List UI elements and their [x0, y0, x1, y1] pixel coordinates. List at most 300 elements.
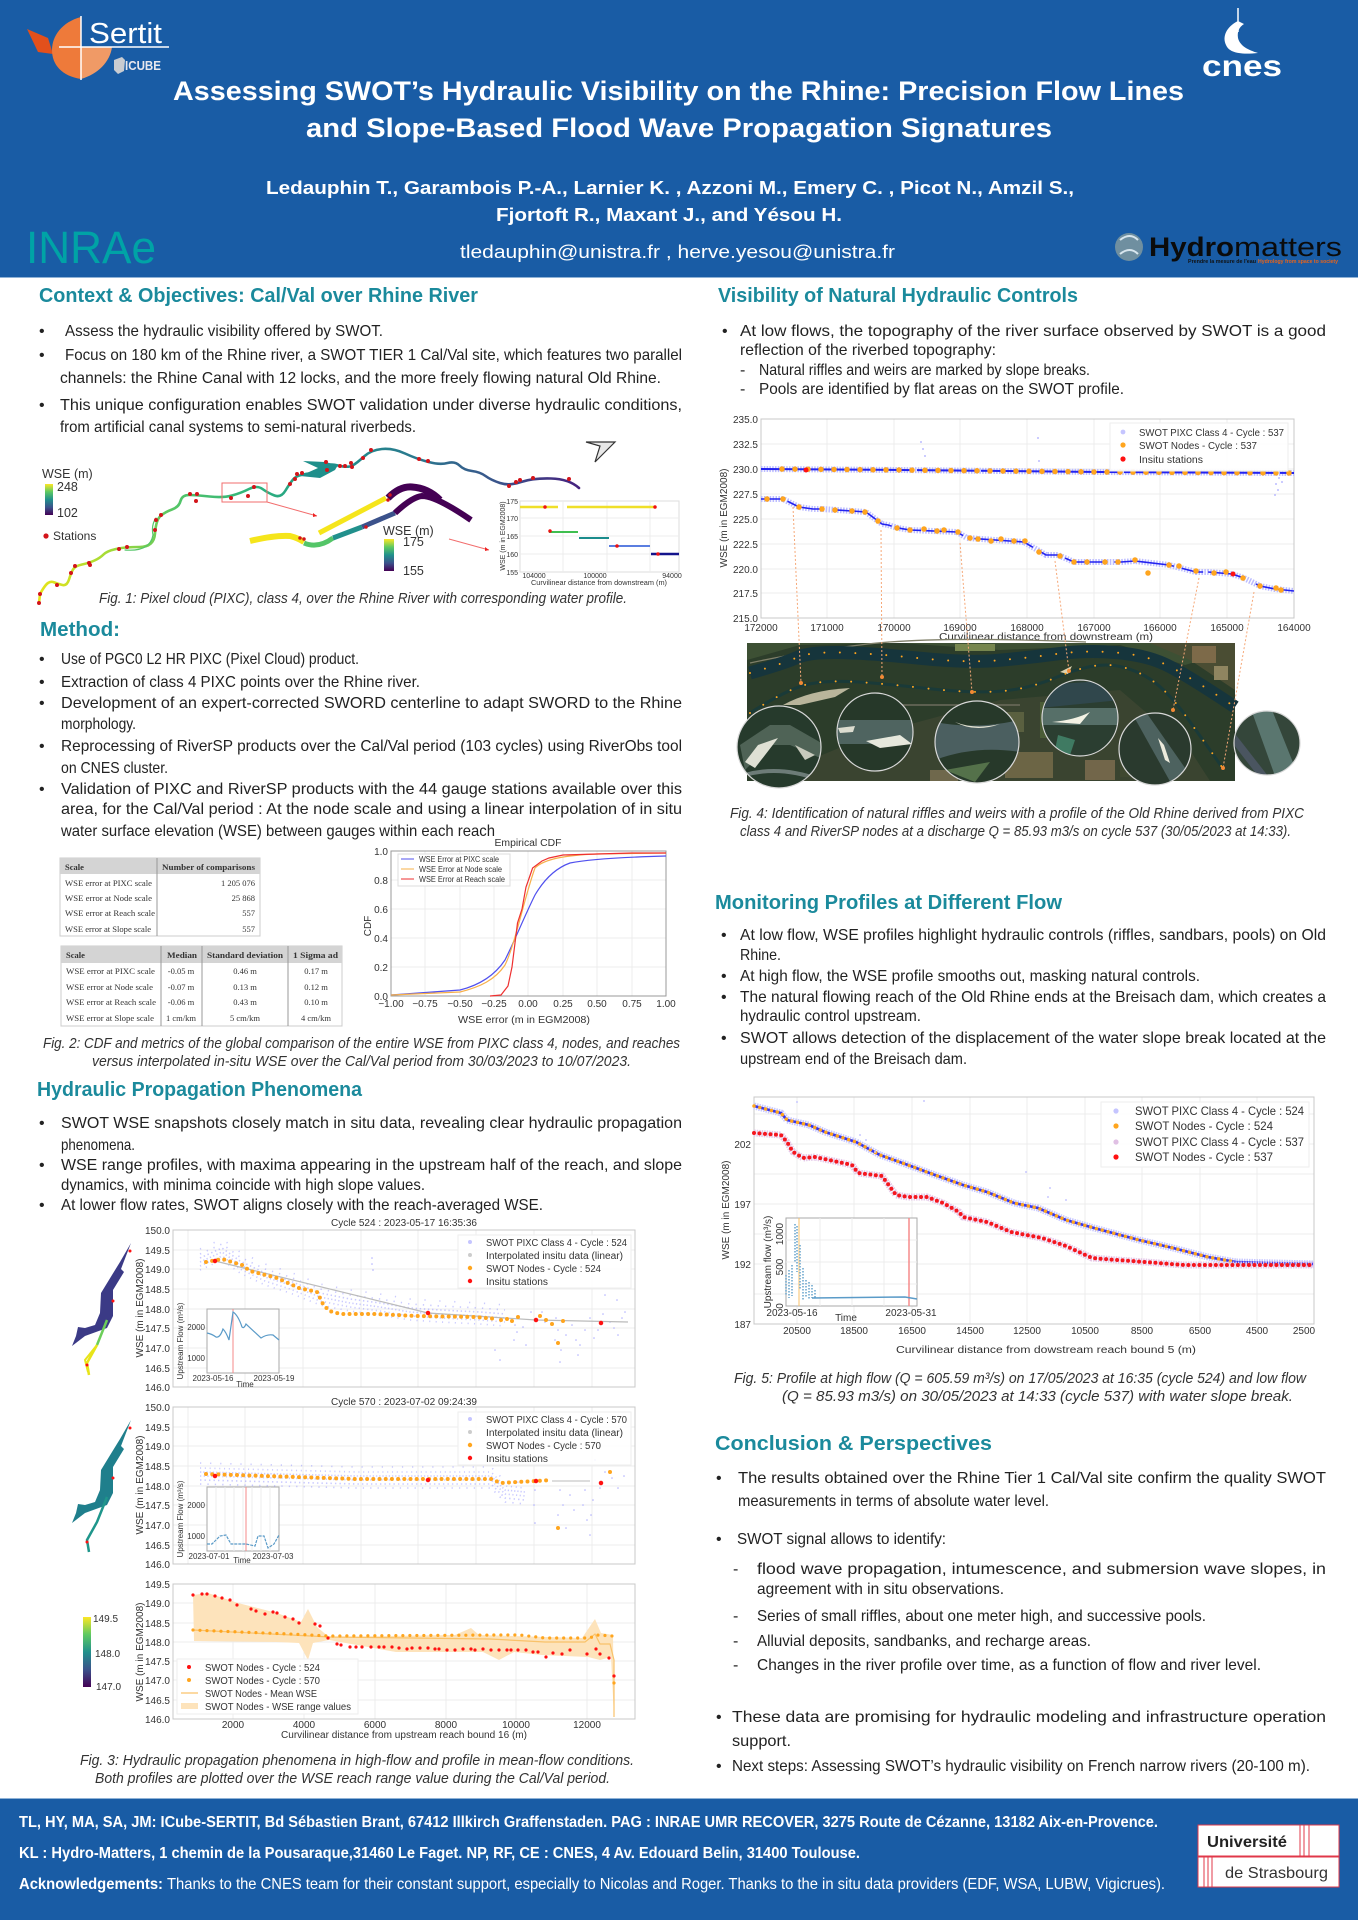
legend: WSE full range: 102	[57, 506, 78, 520]
chart: empirical CDF	[363, 838, 676, 1026]
inset: upstream flow: Upstream flow (m³/s)	[763, 1216, 774, 1308]
axis labels: 171000	[810, 623, 844, 634]
caption: figure 2: versus interpolated in-situ WSE over the Cal/Val period from 30/03/2023 to 10/07/2023.	[92, 1053, 631, 1070]
text block: conclusion: •	[716, 1758, 722, 1775]
logo: Hydromatters	[1115, 232, 1342, 265]
axis labels: 168000	[1010, 623, 1044, 634]
legend: cycle 570: Insitu stations	[486, 1454, 548, 1465]
legend: cycle 524: Insitu stations	[486, 1277, 548, 1288]
axis labels: 148.5	[145, 1619, 170, 1630]
axis labels: 4500	[1246, 1326, 1269, 1337]
table: error metrics: 4 cm/km	[301, 1013, 331, 1023]
text block: conclusion: Next steps: Assessing SWOT’s hydraulic visibility on French narrow rivers (20-100 m).	[732, 1758, 1310, 1775]
axis labels: 149.0	[145, 1442, 170, 1453]
caption: figure 2	[43, 1035, 680, 1070]
colorbar: reach WSE: 148.0	[95, 1649, 120, 1660]
bullet list: context: from artificial canal systems to semi-natural riverbeds.	[60, 419, 416, 436]
inset: upstream flow: 2023-05-31	[885, 1308, 937, 1319]
logo: Hydromatters: matters	[1234, 232, 1342, 262]
logo: Hydromatters: Hydro	[1149, 232, 1234, 262]
axis labels: 6500	[1189, 1326, 1212, 1337]
legend: cycle 524: SWOT PIXC Class 4 - Cycle : 524	[486, 1238, 627, 1249]
cycle 524 nodes	[193, 1594, 614, 1676]
chart: empirical CDF: Empirical CDF	[494, 838, 562, 849]
legend: cycle 537: SWOT PIXC Class 4 - Cycle : 537	[1139, 428, 1284, 439]
legend: cycle 570	[458, 1412, 631, 1465]
locator box and arrows	[222, 483, 489, 550]
river course colored by WSE	[39, 449, 579, 603]
table: number of comparisons: 1 205 076	[221, 878, 255, 888]
legend: cycle 524: SWOT Nodes - Cycle : 524	[486, 1264, 601, 1275]
inset: upstream flow 570: Time	[233, 1556, 251, 1565]
bullet list: method: on CNES cluster.	[61, 760, 168, 777]
contact emails: tledauphin@unistra.fr , herve.yesou@unistra.fr	[460, 242, 895, 262]
table: error metrics: 0.12 m	[304, 982, 328, 992]
axis labels: 150.0	[145, 1403, 170, 1414]
axis labels: 235.0	[733, 415, 758, 426]
axis labels	[719, 415, 1311, 643]
bullet list: visibility: At low flows, the topography of the river surface observed by SWOT is a good	[740, 323, 1326, 340]
axis labels	[135, 1226, 170, 1394]
authors: Fjortoft R., Maxant J., and Yésou H.	[496, 205, 842, 225]
logo: Sertit ICube: Sertit	[89, 18, 162, 50]
axis labels: 14500	[956, 1326, 984, 1337]
table: error metrics: 0.13 m	[233, 982, 257, 992]
bullet list: method: water surface elevation (WSE) between gauges within each reach	[60, 823, 495, 840]
bullet list: hydraulic propagation: •	[39, 1115, 45, 1132]
text block: conclusion: These data are promising for hydraulic modeling and infrastructure operation	[732, 1709, 1326, 1726]
legend: WSE full range: Stations	[53, 529, 96, 543]
chart: cycle 524 profile: Cycle 524 : 2023-05-17 16:35:36	[331, 1218, 477, 1229]
table: error metrics: Median	[167, 950, 197, 960]
axis labels: 147.5	[145, 1324, 170, 1335]
heading: monitoring: Monitoring Profiles at Different Flow	[715, 892, 1062, 914]
table: number of comparisons	[60, 858, 260, 936]
axis labels: 148.0	[145, 1638, 170, 1649]
axis labels: 220.0	[733, 565, 758, 576]
axis labels: 230.0	[733, 465, 758, 476]
legend: flows	[1101, 1102, 1309, 1167]
text block: conclusion: Changes in the river profile over time, as a function of flow and river level.	[757, 1657, 1261, 1674]
heading: conclusion: Conclusion & Perspectives	[715, 1433, 992, 1455]
axis labels: 149.0	[145, 1599, 170, 1610]
cycle 570 nodes	[193, 1630, 613, 1638]
logo: INRAE: INRAe	[26, 222, 156, 273]
text block: conclusion: agreement with in situ observations.	[757, 1581, 1004, 1598]
text block: conclusion: Alluvial deposits, sandbanks, and recharge areas.	[757, 1633, 1091, 1650]
axis labels: 146.5	[145, 1696, 170, 1707]
axis labels: 147.0	[145, 1521, 170, 1532]
zoom circle: weir	[1233, 710, 1301, 776]
chart: empirical CDF: 0.4	[374, 934, 388, 945]
axis labels: WSE (m in EGM2008)	[135, 1436, 146, 1534]
inset: upstream flow: 1000	[775, 1222, 786, 1245]
caption: figure 5: Fig. 5: Profile at high flow (Q = 605.59 m³/s) on 17/05/2023 at 16:35 (cycle 524) and low flow	[734, 1370, 1307, 1387]
caption: figure 5: (Q = 85.93 m3/s) on 30/05/2023 at 14:33 (cycle 537) with water slope break.	[782, 1388, 1293, 1405]
inset: upstream flow 524	[176, 1302, 295, 1389]
table: error metrics: 0.46 m	[233, 966, 257, 976]
canal profile	[761, 469, 1294, 473]
legend: WSE zoom range: 155	[403, 564, 424, 578]
PIXC scatter	[200, 1239, 505, 1326]
inset: water profile: 170	[506, 516, 518, 523]
inset: upstream flow 524: 2000	[187, 1323, 206, 1332]
legend: cycle 537: Insitu stations	[1139, 455, 1203, 466]
bullet list: monitoring: Rhine.	[740, 947, 781, 964]
table: error metrics: 0.43 m	[233, 997, 257, 1007]
table: error metrics: WSE error at Slope scale	[66, 1013, 154, 1023]
axis labels: 6000	[364, 1720, 387, 1731]
bullet list: method: •	[39, 674, 45, 691]
bullet list: visibility	[722, 323, 1326, 398]
axis labels: 148.5	[145, 1285, 170, 1296]
table: number of comparisons: WSE error at Node scale	[65, 893, 152, 903]
axis labels: Curvilinear distance from downstream (m)	[939, 632, 1153, 643]
text block: conclusion: Series of small riffles, about one meter high, and successive pools.	[757, 1608, 1206, 1625]
text block: conclusion	[716, 1470, 1326, 1775]
inset: water profile: WSE (m in EGM2008)	[500, 501, 507, 571]
table: number of comparisons: 557	[242, 908, 255, 918]
inset: water profile: 100000	[583, 573, 607, 580]
table: error metrics: 0.10 m	[304, 997, 328, 1007]
axis labels: 217.5	[733, 589, 758, 600]
legend: WSE full range: WSE (m)	[42, 467, 93, 481]
axis labels: 147.5	[145, 1657, 170, 1668]
chart: empirical CDF: WSE error (m in EGM2008)	[458, 1015, 590, 1026]
legend: cycle 537: SWOT Nodes - Cycle : 537	[1139, 441, 1257, 452]
legend: WSE full range	[42, 467, 96, 543]
text block: conclusion: support.	[732, 1733, 791, 1750]
bullet list: method: Development of an expert-corrected SWORD centerline to adapt SWORD to the Rhine	[61, 695, 682, 712]
table: number of comparisons: 557	[242, 924, 255, 934]
dashed callouts from profile to image	[793, 507, 1254, 768]
legend: range chart: SWOT Nodes - WSE range values	[205, 1702, 351, 1713]
bullet list: method: •	[39, 738, 45, 755]
bullet list: visibility: reflection of the riverbed topography:	[740, 342, 996, 359]
stations on map	[39, 450, 569, 603]
legend: flows: SWOT Nodes - Cycle : 524	[1135, 1119, 1273, 1133]
axis labels: 146.5	[145, 1364, 170, 1375]
authors	[266, 178, 1074, 225]
bullet list: monitoring: •	[721, 1030, 727, 1047]
inset: upstream flow 524: Upstream Flow (m³/s)	[176, 1302, 185, 1379]
axis labels: 167000	[1077, 623, 1111, 634]
axis labels: 146.0	[145, 1560, 170, 1571]
inset: upstream flow 524: 1000	[187, 1354, 206, 1363]
panel: conclusion and perspectives	[715, 1433, 1326, 1775]
table: number of comparisons: Number of comparisons	[162, 862, 256, 872]
legend: CDF: WSE Error at Node scale	[419, 865, 503, 874]
bullet list: context: •	[39, 347, 45, 364]
bullet list: method: morphology.	[61, 716, 136, 733]
axis labels: 165000	[1210, 623, 1244, 634]
bullet list: method: •	[39, 651, 45, 668]
WSE range band	[193, 1593, 614, 1717]
axis labels	[135, 1580, 601, 1741]
table: error metrics: -0.05 m	[168, 966, 195, 976]
axis labels: 222.5	[733, 540, 758, 551]
circle outlines	[737, 680, 1300, 788]
inset: upstream flow: Time	[835, 1313, 857, 1324]
inset: upstream flow 570: Upstream Flow (m³/s)	[176, 1480, 185, 1557]
cycle 537 profile	[754, 1133, 1314, 1265]
axis labels: 166000	[1143, 623, 1177, 634]
bullet list: hydraulic propagation: phenomena.	[61, 1137, 135, 1154]
heading: method: Method:	[40, 619, 120, 641]
axis labels: 227.5	[733, 490, 758, 501]
axis labels: 148.0	[145, 1305, 170, 1316]
logo: Université de Strasbourg: Université	[1207, 1834, 1287, 1851]
axis labels: 172000	[744, 623, 778, 634]
bullet list: monitoring: SWOT allows detection of the displacement of the water slope break located at the	[740, 1030, 1326, 1047]
affiliations: TL, HY, MA, SA, JM: ICube-SERTIT, Bd Sébastien Brant, 67412 Illkirch Graffenstaden. PAG : INRAE UMR RECOVER, 3275 Route de Cézanne, 13182 Aix-en-Provence.	[19, 1814, 1158, 1831]
axis labels: 215.0	[733, 614, 758, 625]
axis labels: 150.0	[145, 1226, 170, 1237]
inset: upstream flow: 0	[775, 1303, 786, 1309]
bullet list: hydraulic propagation: SWOT WSE snapshots closely match in situ data, revealing clear hydraulic propagation	[61, 1115, 682, 1132]
legend: CDF	[398, 854, 510, 886]
table: number of comparisons: 25 868	[232, 893, 255, 903]
bullet list: monitoring: upstream end of the Breisach dam.	[740, 1051, 967, 1068]
bullet list: monitoring: hydraulic control upstream.	[740, 1008, 921, 1025]
zoomed reach	[250, 487, 471, 545]
header banner	[0, 0, 1358, 278]
map: reach at mean flow	[72, 1420, 131, 1552]
inset: water profile: 155	[506, 570, 518, 577]
Old Rhine profile	[761, 499, 1294, 591]
caption: figure 1: Fig. 1: Pixel cloud (PIXC), class 4, over the Rhine River with corresponding water profile.	[99, 590, 627, 607]
caption: figure 3	[80, 1752, 634, 1787]
inset: water profile: Curvilinear distance from downstream (m)	[531, 580, 667, 587]
logo: Université de Strasbourg: de Strasbourg	[1225, 1865, 1328, 1882]
panel: monitoring profiles at different flow	[715, 892, 1326, 1405]
bullet list: visibility: Pools are identified by flat areas on the SWOT profile.	[759, 381, 1124, 398]
colorbar: reach WSE: 147.0	[96, 1682, 121, 1693]
title: and Slope-Based Flood Wave Propagation Signatures	[306, 113, 1052, 143]
axis labels: 149.5	[145, 1246, 170, 1257]
caption: figure 2: Fig. 2: CDF and metrics of the global comparison of the entire WSE from PIXC class 4, nodes, and reaches	[43, 1035, 680, 1052]
inset: upstream flow 570: 2023-07-03	[253, 1552, 294, 1561]
acknowledgements: Acknowledgements:	[19, 1876, 163, 1893]
chart: empirical CDF: 0.50	[587, 999, 607, 1010]
table: error metrics: -0.07 m	[168, 982, 195, 992]
icon: north arrow	[586, 442, 615, 462]
axis labels: 192	[734, 1260, 751, 1271]
bullet list: hydraulic propagation: dynamics, with minima coincide with high slope values.	[61, 1177, 425, 1194]
acknowledgements: Thanks to the CNES team for their constant support, especially to Nicolas and Roger. Thanks to the in situ data providers (EDF, WSA, LUBW, Vigicrues).	[167, 1876, 1165, 1893]
bullet list: method: area, for the Cal/Val period : At the node scale and using a linear interpolation of in situ	[61, 801, 682, 818]
axis labels: 2000	[222, 1720, 245, 1731]
colorbar: reach WSE	[83, 1614, 121, 1693]
chart: Old Rhine and canal profile cycle 537	[719, 415, 1311, 643]
bullet list: monitoring	[721, 927, 1326, 1068]
zoom circle: pool	[935, 700, 1020, 785]
inset: upstream flow 570: 2023-07-01	[189, 1552, 230, 1561]
inset: upstream flow: 500	[775, 1258, 786, 1275]
table: error metrics: WSE error at Node scale	[66, 982, 153, 992]
zoom circle: sandbar	[1042, 682, 1118, 756]
zoom circle: riffle 1	[738, 722, 820, 788]
table: error metrics: 1 cm/km	[166, 1013, 196, 1023]
inset: upstream flow 524: 2023-05-19	[254, 1374, 295, 1383]
axis labels: Curvilinear distance from upstream reach bound 16 (m)	[281, 1730, 527, 1741]
inset: upstream flow 570: 2000	[187, 1501, 206, 1510]
bullet list: context: Assess the hydraulic visibility offered by SWOT.	[65, 323, 383, 340]
bullet list: method: Use of PGC0 L2 HR PIXC (Pixel Cloud) product.	[61, 651, 359, 668]
legend: range chart: SWOT Nodes - Mean WSE	[205, 1689, 317, 1700]
panel: hydraulic propagation phenomena	[37, 1079, 682, 1787]
panel: visibility of natural hydraulic controls	[718, 285, 1326, 840]
chart: empirical CDF: −0.25	[481, 999, 507, 1010]
axis labels: 16500	[898, 1326, 926, 1337]
legend: cycle 537	[1110, 423, 1288, 471]
axis labels: 20500	[783, 1326, 811, 1337]
panel: method	[39, 619, 682, 1070]
axis labels: 197	[734, 1200, 751, 1211]
table: number of comparisons: WSE error at Slope scale	[65, 924, 151, 934]
caption: figure 4	[730, 805, 1304, 840]
bullet list: method: •	[39, 695, 45, 712]
chart: high and low flow profiles	[721, 1097, 1316, 1356]
bullet list: hydraulic propagation: •	[39, 1157, 45, 1174]
chart: empirical CDF: 0.2	[374, 963, 388, 974]
title	[173, 76, 1184, 143]
bullet list: hydraulic propagation: WSE range profiles, with maxima appearing in the upstream half of the reach, and slope	[61, 1157, 682, 1174]
axis labels: 170000	[877, 623, 911, 634]
axis labels: Curvilinear distance from dowstream reach bound 5 (m)	[896, 1345, 1196, 1356]
chart: cycle 570 profile: Cycle 570 : 2023-07-02 09:24:39	[331, 1397, 477, 1408]
legend: cycle 524: Interpolated insitu data (linear)	[486, 1251, 623, 1262]
axis labels: 18500	[840, 1326, 868, 1337]
table: error metrics: 5 cm/km	[230, 1013, 260, 1023]
legend: cycle 570: SWOT Nodes - Cycle : 570	[486, 1441, 601, 1452]
table: number of comparisons: Scale	[65, 862, 84, 872]
bullet list: context: This unique configuration enables SWOT validation under diverse hydraulic conditions,	[60, 397, 682, 414]
affiliations: KL : Hydro-Matters, 1 chemin de la Pousaraque,31460 Le Faget. NP, RF, CE : CNES, 4 Av. Edouard Belin, 31400 Toulouse.	[19, 1845, 860, 1862]
table: error metrics: WSE error at PIXC scale	[66, 966, 155, 976]
chart: cycle 524 profile	[135, 1218, 635, 1394]
chart: empirical CDF: CDF	[363, 916, 374, 936]
legend: cycle 570: Interpolated insitu data (linear)	[486, 1428, 623, 1439]
bullet list: monitoring: •	[721, 989, 727, 1006]
bullet list: method	[39, 651, 682, 840]
text block: conclusion: The results obtained over the Rhine Tier 1 Cal/Val site confirm the quality SWOT	[738, 1470, 1326, 1487]
legend: flows: SWOT Nodes - Cycle : 537	[1135, 1150, 1273, 1164]
inset: upstream flow 524: 2023-05-16	[193, 1374, 234, 1383]
legend: WSE full range: 248	[57, 480, 78, 494]
axis labels: 232.5	[733, 440, 758, 451]
bullet list: monitoring: •	[721, 968, 727, 985]
inset: water profile: 175	[506, 499, 518, 506]
axis labels: 187	[734, 1320, 751, 1331]
bullet list: monitoring: At low flow, WSE profiles highlight hydraulic controls (riffles, sandbars, pools) on Old	[740, 927, 1326, 944]
text block: conclusion: -	[733, 1633, 738, 1650]
bullet list: method: Extraction of class 4 PIXC points over the Rhine river.	[61, 674, 420, 691]
chart: empirical CDF: 0.25	[553, 999, 573, 1010]
axis labels: 4000	[293, 1720, 316, 1731]
bullet list: hydraulic propagation: •	[39, 1197, 45, 1214]
bullet list: method: •	[39, 781, 45, 798]
zoom circle: bank bar	[1118, 712, 1192, 786]
axis labels: WSE (m in EGM2008)	[721, 1161, 732, 1259]
text block: conclusion: •	[716, 1531, 722, 1548]
text block: conclusion: SWOT signal allows to identify:	[737, 1531, 946, 1548]
footer banner	[0, 1798, 1358, 1920]
heading: visibility: Visibility of Natural Hydraulic Controls	[718, 285, 1078, 307]
inset: upstream flow 524: Time	[236, 1380, 254, 1389]
logo: Université de Strasbourg	[1198, 1825, 1339, 1887]
chart: empirical CDF: 0.00	[518, 999, 538, 1010]
axis labels: 10500	[1071, 1326, 1099, 1337]
inset: upstream flow	[763, 1216, 937, 1324]
bullet list: monitoring: The natural flowing reach of the Old Rhine ends at the Breisach dam, which creates a	[740, 989, 1326, 1006]
bullet list: context: •	[39, 323, 45, 340]
legend: cycle 570: SWOT PIXC Class 4 - Cycle : 570	[486, 1415, 627, 1426]
axis labels: 146.0	[145, 1383, 170, 1394]
logo: Hydromatters: Prendre la mesure de l'eau	[1188, 259, 1256, 265]
caption: figure 4: Fig. 4: Identification of natural riffles and weirs with a profile of the Old Rhine derived from PIXC	[730, 805, 1304, 822]
text block: conclusion: •	[716, 1470, 722, 1487]
colorbar: reach WSE: 149.5	[93, 1614, 118, 1625]
legend: flows: SWOT PIXC Class 4 - Cycle : 537	[1135, 1135, 1304, 1149]
inset: water profile: 104000	[522, 573, 546, 580]
axis labels: 147.0	[145, 1676, 170, 1687]
satellite image with river channels	[747, 639, 1235, 781]
legend: range chart: SWOT Nodes - Cycle : 524	[205, 1663, 320, 1674]
heading: context: Context & Objectives: Cal/Val over Rhine River	[39, 285, 478, 307]
axis labels: 146.0	[145, 1715, 170, 1726]
axis labels: 164000	[1277, 623, 1311, 634]
bullet list: hydraulic propagation: At lower flow rates, SWOT aligns closely with the reach-averaged WSE.	[61, 1197, 543, 1214]
legend: range chart: SWOT Nodes - Cycle : 570	[205, 1676, 320, 1687]
map: reach at high flow	[72, 1243, 131, 1375]
chart: empirical CDF: 0.0	[374, 992, 388, 1003]
bullet list: hydraulic propagation	[39, 1115, 682, 1214]
heading: hydraulic propagation: Hydraulic Propagation Phenomena	[37, 1079, 363, 1101]
legend: WSE zoom range: 175	[403, 535, 424, 549]
affiliations	[19, 1814, 1158, 1862]
cycle 524 profile	[754, 1106, 1314, 1264]
table: number of comparisons: WSE error at PIXC scale	[65, 878, 152, 888]
axis labels: 8500	[1131, 1326, 1154, 1337]
logo: Sertit ICube: ICUBE	[125, 58, 161, 73]
inset: upstream flow 570	[176, 1480, 294, 1565]
caption: figure 3: Both profiles are plotted over the WSE reach range value during the Cal/Val period.	[95, 1770, 610, 1787]
legend: CDF: WSE Error at PIXC scale	[419, 855, 499, 864]
bullet list: context: •	[39, 397, 45, 414]
axis labels: 147.5	[145, 1501, 170, 1512]
caption: figure 3: Fig. 3: Hydraulic propagation phenomena in high-flow and profile in mean-flow conditions.	[80, 1752, 634, 1769]
legend: cycle 524	[458, 1235, 631, 1288]
inset: water profile: 160	[506, 552, 518, 559]
inset: water profile	[500, 499, 682, 587]
bullet list: visibility: -	[740, 381, 745, 398]
table: error metrics: 0.17 m	[304, 966, 328, 976]
text block: conclusion: flood wave propagation, intumescence, and submersion wave slopes, in	[757, 1561, 1326, 1578]
mean WSE line	[193, 1630, 614, 1717]
bullet list: visibility: •	[722, 323, 728, 340]
chart: empirical CDF: 0.6	[374, 905, 388, 916]
axis labels: 12000	[573, 1720, 601, 1731]
inset: upstream flow: 2023-05-16	[766, 1308, 818, 1319]
legend: WSE zoom range	[383, 524, 434, 578]
logo: Sertit ICube	[27, 16, 169, 80]
bullet list: method: Validation of PIXC and RiverSP products with the 44 gauge stations available over this	[61, 781, 682, 798]
axis labels: 146.5	[145, 1541, 170, 1552]
chart: empirical CDF: −0.75	[412, 999, 438, 1010]
axis labels: 149.0	[145, 1265, 170, 1276]
axis labels: 148.0	[145, 1482, 170, 1493]
